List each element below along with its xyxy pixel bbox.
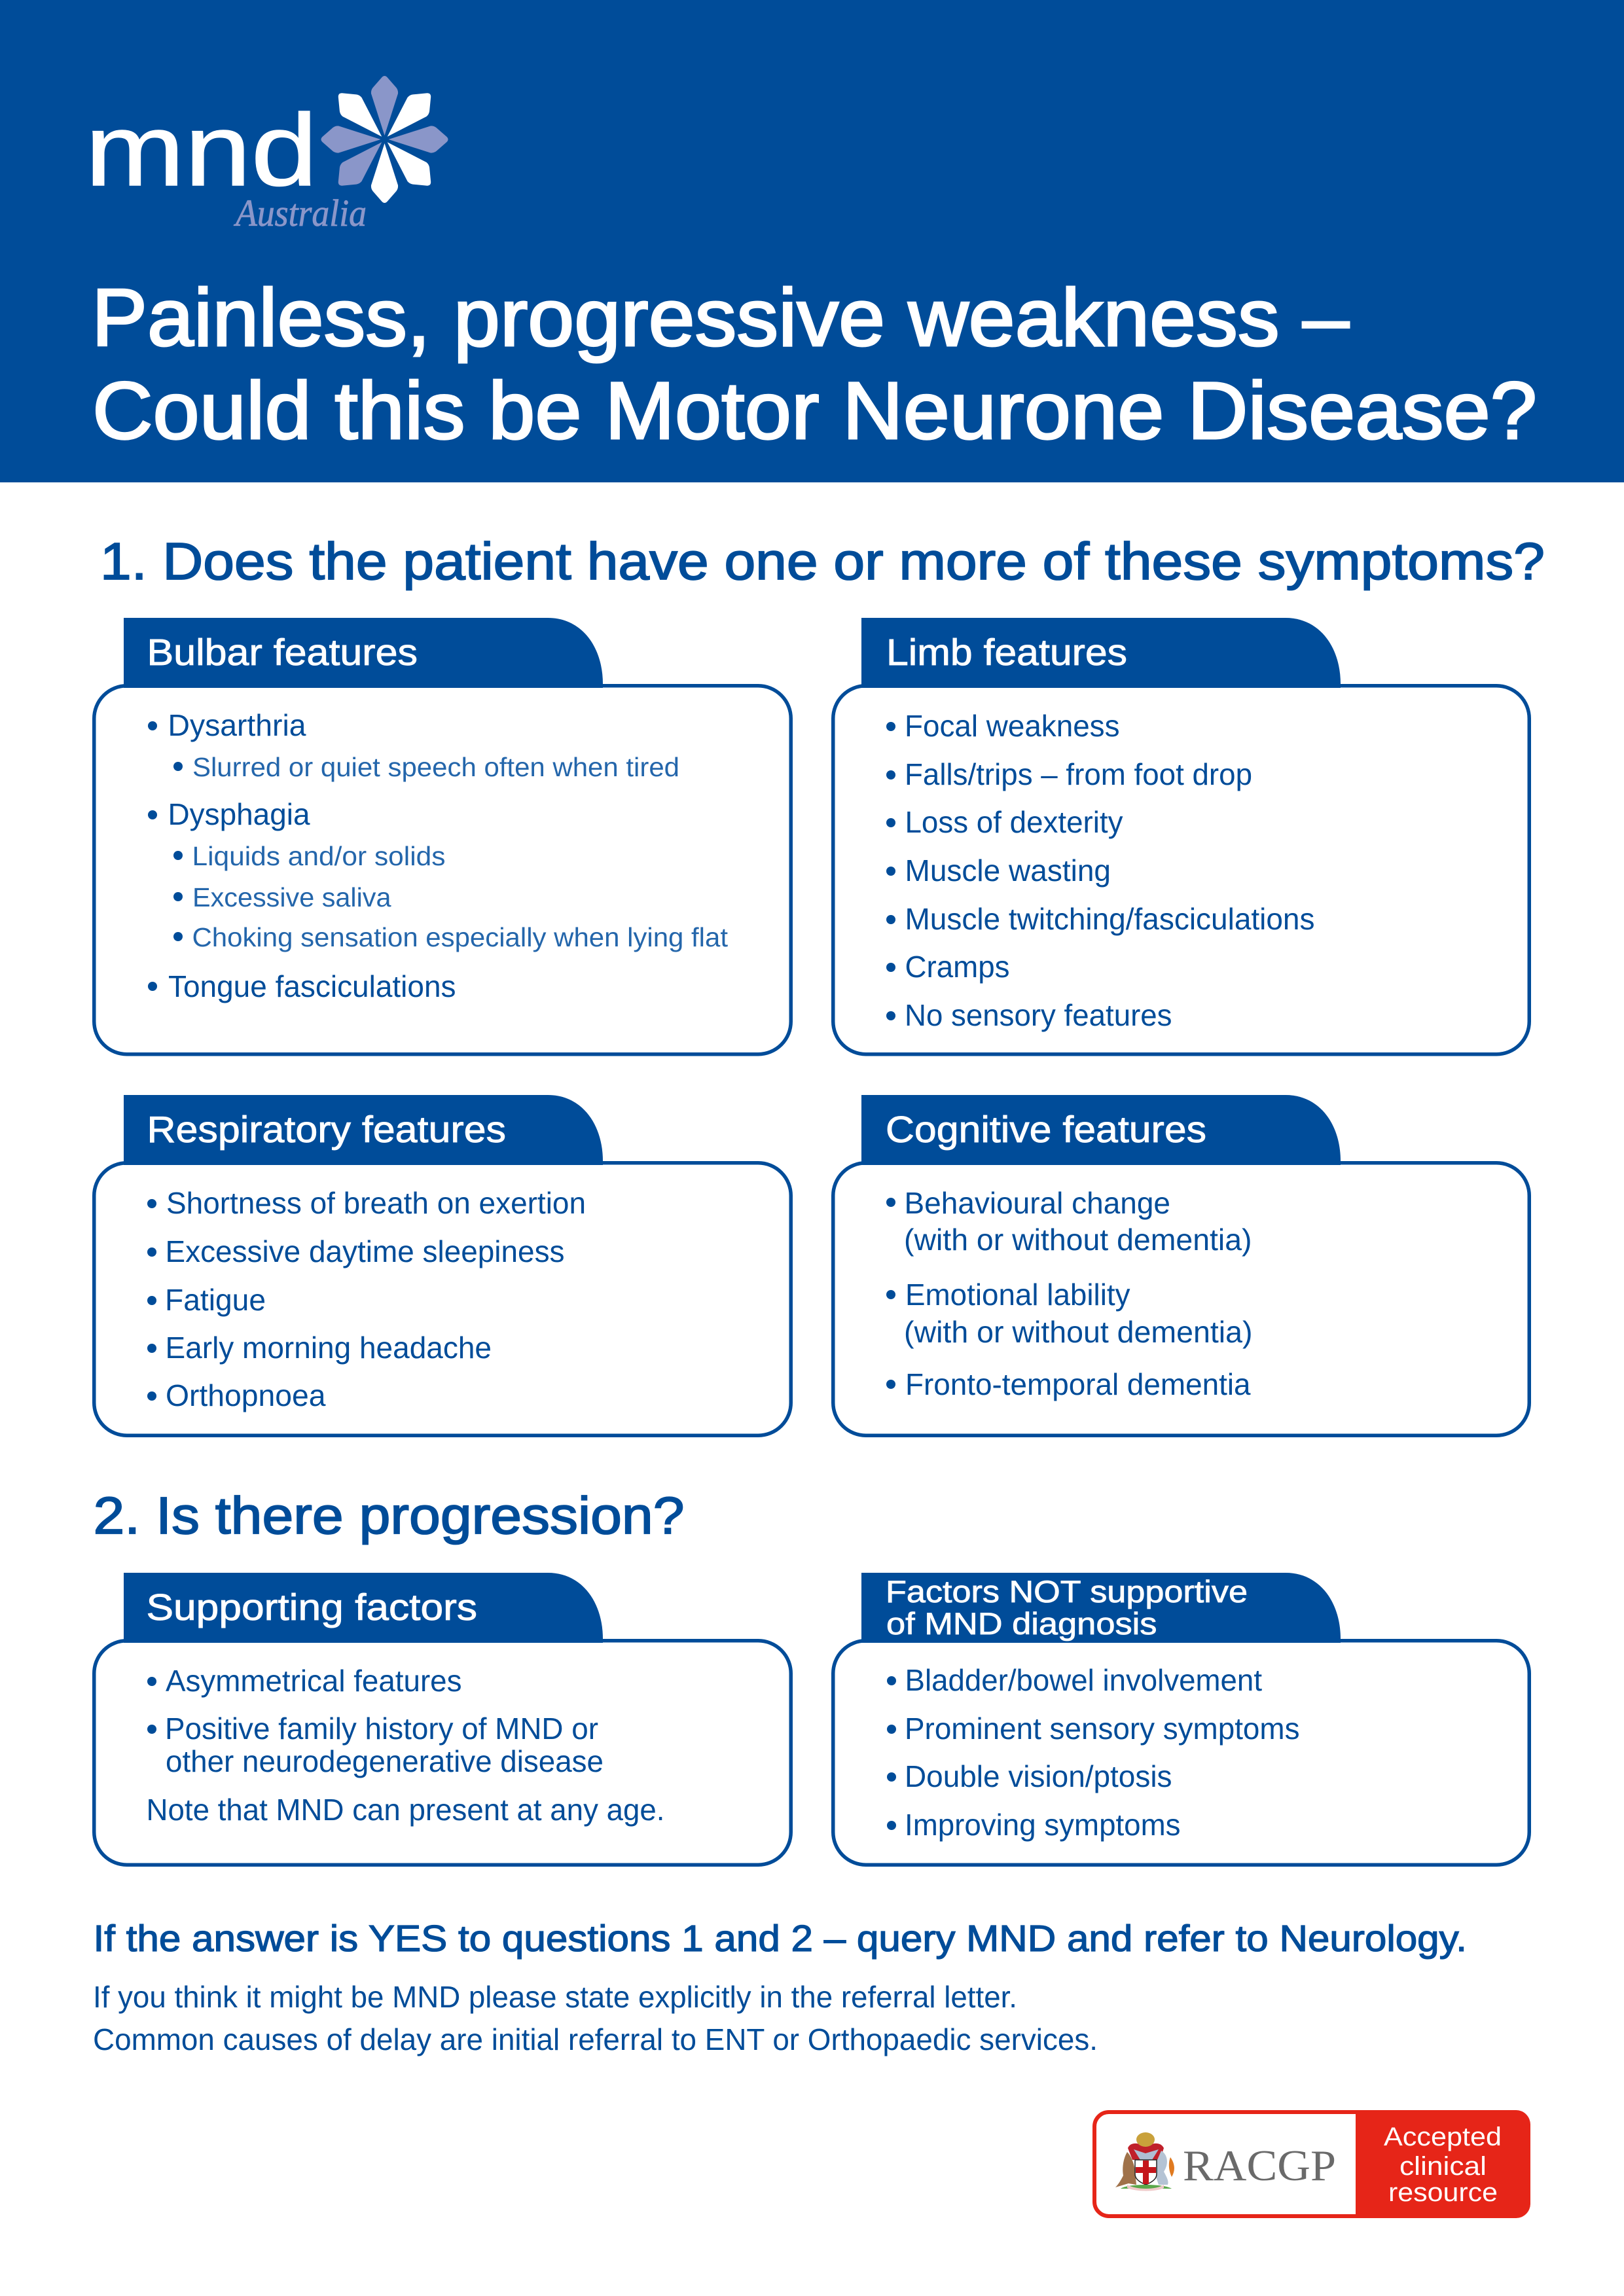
title [92, 273, 1537, 456]
limb symptom list: Focal weakness [905, 709, 1119, 743]
limb symptom list: No sensory features [905, 998, 1172, 1032]
title: Painless, progressive weakness – [92, 273, 1349, 363]
respiratory symptom list: Orthopnoea [166, 1378, 326, 1412]
referral notes [93, 1980, 1098, 2056]
panel: limb features [833, 618, 1529, 1054]
supporting factor list: Positive family history of MND or [165, 1712, 598, 1746]
logo wordmark: mnd [85, 94, 317, 207]
non-supportive factor list: Double vision/ptosis [905, 1759, 1172, 1793]
supporting factor list: Asymmetrical features [166, 1664, 462, 1698]
non-supportive factor list: Bladder/bowel involvement [905, 1663, 1262, 1697]
tab heading: respiratory: Respiratory features [147, 1109, 506, 1151]
tab heading: bulbar: Bulbar features [147, 632, 418, 673]
panel outline [94, 686, 791, 1054]
tab heading: cognitive: Cognitive features [886, 1109, 1206, 1151]
tab heading: factors not supportive [861, 1573, 1341, 1643]
non-supportive factor list [887, 1663, 1300, 1842]
panel outline [833, 1641, 1529, 1865]
respiratory symptom list: Early morning headache [165, 1331, 492, 1365]
supporting factor list: Note that MND can present at any age. [147, 1793, 665, 1827]
tab heading: limb: Limb features [886, 632, 1127, 673]
title: Could this be Motor Neurone Disease? [92, 366, 1537, 456]
cognitive symptom list: Fronto-temporal dementia [905, 1367, 1251, 1401]
logo: MND Australia [85, 76, 448, 234]
logo subtitle: Australia [233, 192, 367, 234]
respiratory symptom list: Shortness of breath on exertion [166, 1186, 586, 1220]
cognitive symptom list [886, 1186, 1253, 1401]
tab heading: factors not supportive: of MND diagnosis [886, 1606, 1157, 1641]
heading: question 2: 2. Is there progression? [93, 1486, 685, 1545]
referral notes: If you think it might be MND please state explicitly in the referral letter. [93, 1980, 1017, 2014]
tab heading: cognitive [861, 1095, 1341, 1165]
panel outline [94, 1641, 791, 1865]
panel: supporting factors [94, 1573, 791, 1865]
bulbar symptom list: Tongue fasciculations [168, 969, 456, 1003]
panel outline [833, 686, 1529, 1054]
badge label: Accepted [1384, 2123, 1502, 2151]
panel outline [94, 1163, 791, 1435]
tab heading: supporting factors [124, 1573, 603, 1643]
bulbar symptom list: Liquids and/or solids [192, 841, 445, 871]
bulbar symptom list: Dysphagia [168, 797, 310, 831]
badge label: resource [1388, 2178, 1498, 2207]
cognitive symptom list: (with or without dementia) [904, 1315, 1253, 1349]
bulbar symptom list: Slurred or quiet speech often when tired [192, 752, 679, 782]
respiratory symptom list: Fatigue [165, 1283, 266, 1317]
panel: cognitive features [833, 1095, 1529, 1435]
non-supportive factor list: Prominent sensory symptoms [905, 1712, 1300, 1746]
panel: respiratory features [94, 1095, 791, 1435]
non-supportive factor list: Improving symptoms [905, 1808, 1181, 1842]
supporting factor list [147, 1664, 665, 1827]
badge label: clinical [1399, 2152, 1487, 2181]
respiratory symptom list: Excessive daytime sleepiness [165, 1234, 564, 1268]
badge red panel [1356, 2110, 1530, 2218]
limb symptom list: Muscle wasting [905, 853, 1111, 888]
badge outline [1094, 2112, 1528, 2216]
icon: flower [321, 76, 448, 203]
tab heading: respiratory [124, 1095, 603, 1165]
supporting factor list: other neurodegenerative disease [166, 1744, 604, 1778]
bulbar symptom list: Choking sensation especially when lying flat [192, 922, 729, 952]
badge: RACGP accepted clinical resource [1094, 2110, 1530, 2218]
cognitive symptom list: Behavioural change [905, 1186, 1170, 1220]
heading: question 1: 1. Does the patient have one or more of these symptoms? [100, 532, 1545, 590]
referral notes: Common causes of delay are initial referral to ENT or Orthopaedic services. [93, 2022, 1098, 2056]
panel outline [833, 1163, 1529, 1435]
limb symptom list: Cramps [905, 950, 1009, 984]
panel: factors not supportive [833, 1573, 1529, 1865]
header band [0, 0, 1624, 482]
badge label [1384, 2123, 1502, 2207]
limb symptom list: Muscle twitching/fasciculations [905, 902, 1314, 936]
panel: bulbar features [94, 618, 791, 1054]
limb symptom list: Loss of dexterity [905, 805, 1123, 839]
limb symptom list: Falls/trips – from foot drop [905, 757, 1252, 791]
respiratory symptom list [147, 1186, 586, 1412]
call to action: If the answer is YES to questions 1 and 2 – query MND and refer to Neurology. [93, 1918, 1467, 1960]
cognitive symptom list: (with or without dementia) [904, 1223, 1252, 1257]
bulbar symptom list: Dysarthria [168, 708, 306, 742]
RACGP wordmark: RACGP [1183, 2142, 1336, 2190]
tab heading: limb [861, 618, 1341, 688]
limb symptom list [886, 709, 1314, 1032]
icon: RACGP coat of arms [1115, 2132, 1174, 2191]
cognitive symptom list: Emotional lability [905, 1278, 1130, 1312]
tab heading: bulbar [124, 618, 603, 688]
bulbar symptom list [148, 708, 729, 1003]
bulbar symptom list: Excessive saliva [192, 882, 391, 912]
tab heading: factors not supportive: Factors NOT supportive [886, 1574, 1248, 1609]
tab heading: supporting factors: Supporting factors [147, 1587, 477, 1628]
